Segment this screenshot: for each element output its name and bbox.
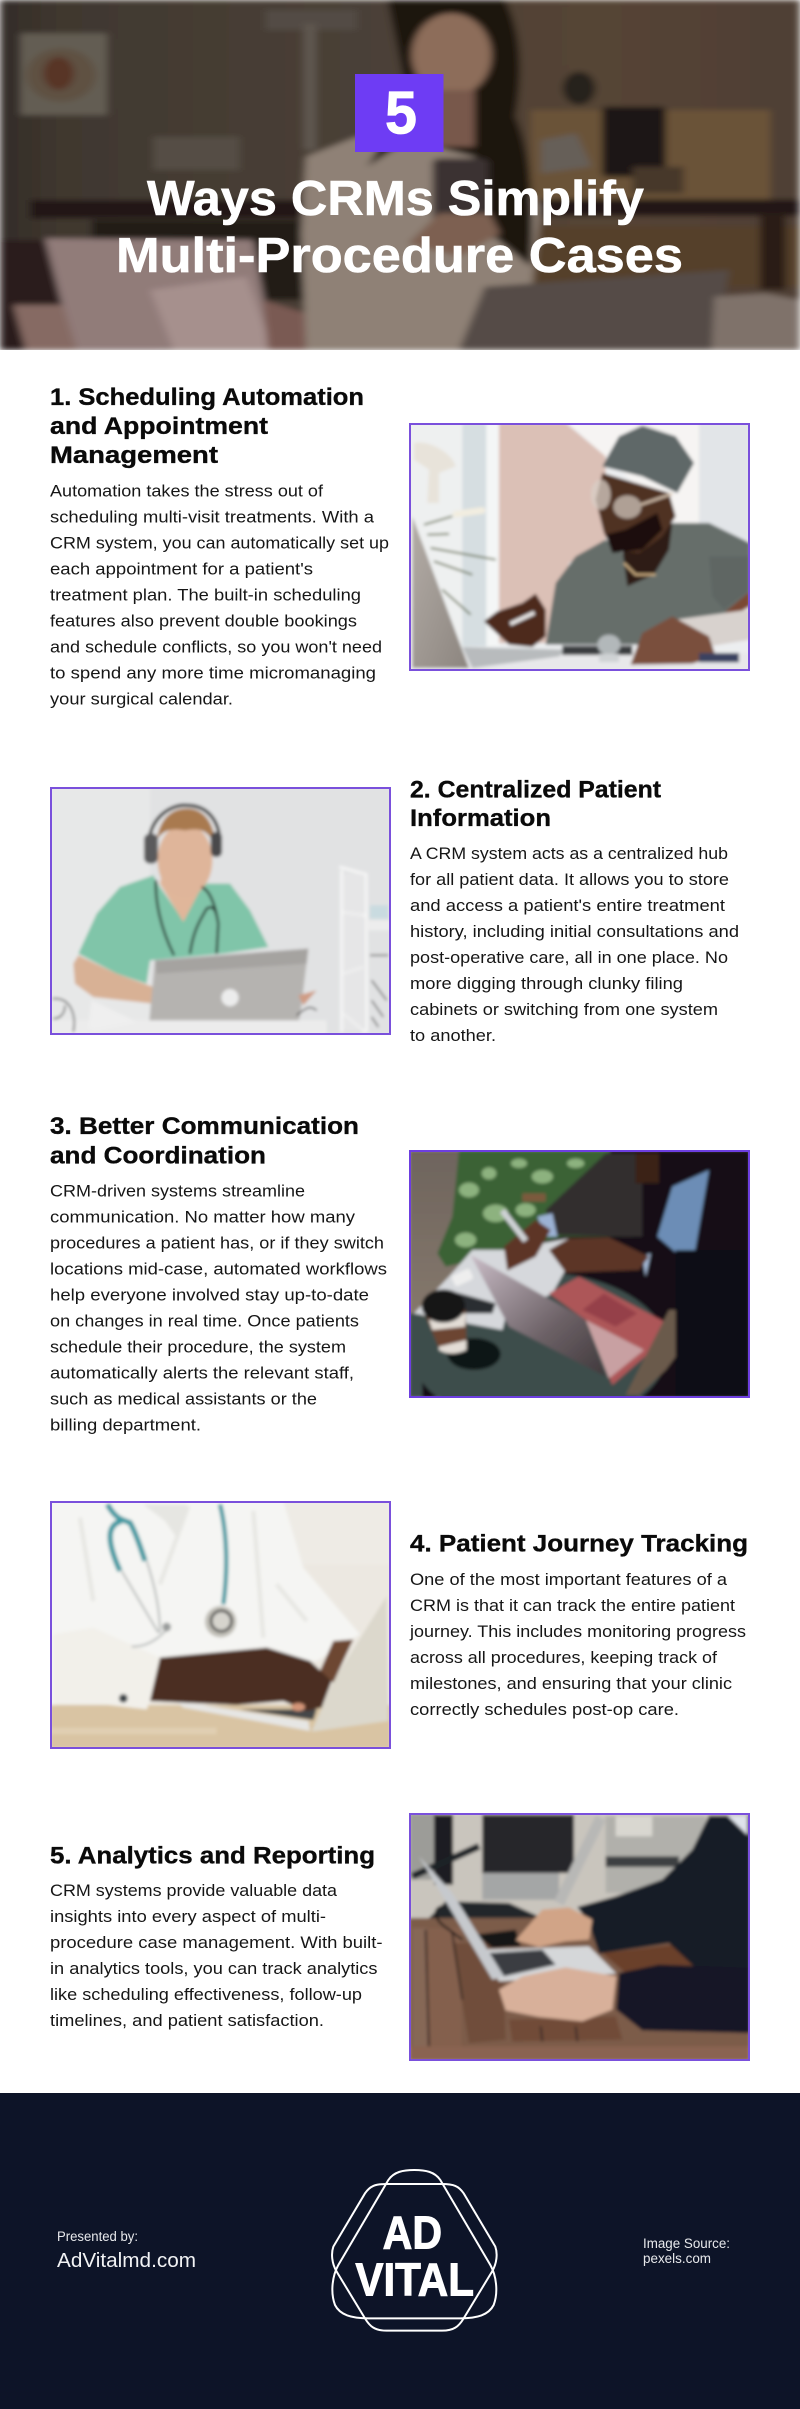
logo: AD VITAL: VITAL bbox=[355, 2253, 474, 2305]
numeral badge: 5 bbox=[385, 80, 417, 146]
body text 2: history, including initial consultations and bbox=[410, 922, 739, 941]
heading 3: and Coordination bbox=[50, 1142, 266, 1170]
body text 5: procedure case management. With built- bbox=[50, 1933, 382, 1952]
image source block: pexels.com bbox=[643, 2251, 711, 2266]
section 2 text: centralized patient information bbox=[410, 776, 739, 1045]
heading 4: 4. Patient Journey Tracking bbox=[410, 1530, 748, 1558]
body text 2: post-operative care, all in one place. No bbox=[410, 948, 728, 967]
photo 1: surgeon at laptop bbox=[409, 423, 750, 671]
body text 2: to another. bbox=[410, 1026, 496, 1045]
body text 3: communication. No matter how many bbox=[50, 1208, 356, 1226]
presented by block bbox=[57, 2229, 196, 2272]
section 5 text: analytics and reporting bbox=[50, 1842, 382, 2030]
section 1 text: scheduling automation bbox=[50, 384, 389, 708]
body text 2 bbox=[410, 844, 739, 1045]
heading 1: Management bbox=[50, 442, 218, 469]
body text 2: more digging through clunky filing bbox=[410, 974, 683, 993]
body text 3: automatically alerts the relevant staff, bbox=[50, 1364, 354, 1382]
title: Multi-Procedure Cases bbox=[116, 229, 683, 283]
body text 4 bbox=[409, 1570, 746, 1719]
body text 3: on changes in real time. Once patients bbox=[50, 1312, 359, 1330]
heading 5: 5. Analytics and Reporting bbox=[50, 1842, 375, 1870]
body text 4: CRM is that it can track the entire patient bbox=[410, 1596, 735, 1615]
heading 2: Information bbox=[410, 805, 551, 832]
body text 1: your surgical calendar. bbox=[50, 690, 233, 708]
body text 3: such as medical assistants or the bbox=[50, 1390, 317, 1408]
body text 5: timelines, and patient satisfaction. bbox=[50, 2011, 324, 2030]
body text 4: correctly schedules post-op care. bbox=[410, 1700, 679, 1719]
body text 3: CRM-driven systems streamline bbox=[50, 1182, 305, 1200]
logo: AD VITAL: AD bbox=[383, 2206, 442, 2258]
body text 2: and access a patient's entire treatment bbox=[410, 896, 725, 915]
body text 1: Automation takes the stress out of bbox=[50, 482, 323, 500]
photo 5: hands on laptop at wooden table bbox=[409, 1813, 750, 2061]
footer bbox=[0, 2093, 800, 2409]
hero background photo bbox=[0, 0, 800, 350]
body text 3: locations mid-case, automated workflows bbox=[50, 1260, 387, 1278]
body text 3: billing department. bbox=[50, 1416, 201, 1434]
heading 1: and Appointment bbox=[50, 413, 268, 440]
body text 1: and schedule conflicts, so you won't need bbox=[50, 638, 382, 656]
body text 2: cabinets or switching from one system bbox=[410, 1000, 718, 1019]
title bbox=[116, 172, 683, 283]
body text 1: to spend any more time micromanaging bbox=[50, 664, 376, 682]
logo: AD VITAL bbox=[331, 2169, 498, 2332]
heading 3: 3. Better Communication bbox=[50, 1113, 359, 1140]
body text 3 bbox=[50, 1182, 387, 1434]
body text 1: each appointment for a patient's bbox=[50, 560, 313, 578]
section 3 text: communication and coordination bbox=[50, 1113, 387, 1434]
image source block: Image Source: bbox=[643, 2236, 730, 2251]
photo 4: doctor typing with stethoscope bbox=[50, 1501, 391, 1749]
numeral badge bbox=[355, 74, 444, 152]
body text 1: treatment plan. The built-in scheduling bbox=[50, 586, 361, 604]
body text 1 bbox=[50, 482, 389, 708]
heading 1 bbox=[50, 384, 364, 469]
body text 5 bbox=[50, 1881, 382, 2030]
body text 5: insights into every aspect of multi- bbox=[50, 1907, 326, 1926]
heading 1: 1. Scheduling Automation bbox=[50, 384, 364, 411]
body text 3: schedule their procedure, the system bbox=[50, 1338, 346, 1356]
body text 5: in analytics tools, you can track analytics bbox=[50, 1959, 378, 1978]
heading 3 bbox=[50, 1113, 359, 1170]
body text 1: scheduling multi-visit treatments. With a bbox=[50, 508, 375, 526]
presented by block: Presented by: bbox=[57, 2229, 138, 2244]
body text 5: like scheduling effectiveness, follow-up bbox=[50, 1985, 362, 2004]
body text 1: features also prevent double bookings bbox=[50, 612, 357, 630]
body text 2: A CRM system acts as a centralized hub bbox=[410, 844, 728, 863]
photo 2: nurse with headphones at laptop bbox=[50, 787, 391, 1035]
section 4 text: patient journey tracking bbox=[409, 1530, 748, 1719]
body text 5: CRM systems provide valuable data bbox=[50, 1881, 338, 1900]
body text 4: journey. This includes monitoring progress bbox=[409, 1622, 746, 1641]
presented by block: AdVitalmd.com bbox=[57, 2250, 196, 2272]
title: Ways CRMs Simplify bbox=[147, 172, 644, 226]
heading 2: 2. Centralized Patient bbox=[410, 776, 661, 804]
body text 2: for all patient data. It allows you to store bbox=[410, 870, 729, 889]
body text 1: CRM system, you can automatically set up bbox=[50, 534, 389, 552]
body text 3: help everyone involved stay up-to-date bbox=[50, 1286, 369, 1304]
body text 4: One of the most important features of a bbox=[410, 1570, 728, 1589]
heading 2 bbox=[410, 776, 661, 832]
body text 4: across all procedures, keeping track of bbox=[410, 1648, 717, 1667]
photo 3: writing notes beside a red laptop bbox=[409, 1150, 750, 1427]
image source block bbox=[643, 2236, 730, 2266]
body text 4: milestones, and ensuring that your clinic bbox=[410, 1674, 733, 1693]
hero banner bbox=[0, 0, 800, 350]
body text 3: procedures a patient has, or if they switch bbox=[50, 1234, 384, 1252]
